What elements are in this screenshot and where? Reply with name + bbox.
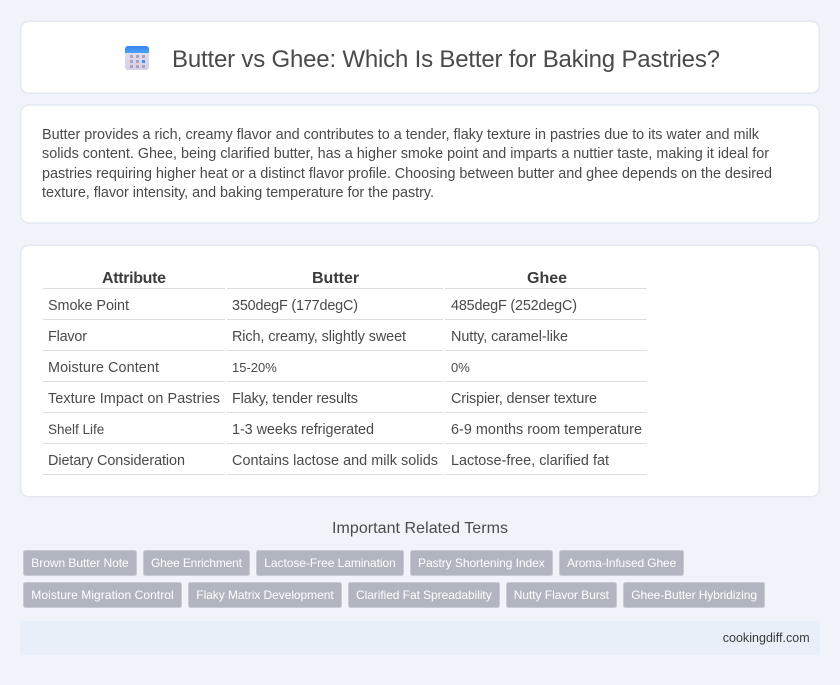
table row: shelf life	[48, 422, 642, 438]
table row: flavor	[48, 329, 568, 345]
tag: Ghee-Butter Hybridizing	[624, 582, 764, 608]
tag: Flaky Matrix Development	[188, 582, 342, 608]
table row: moisture content: 15-20%	[232, 360, 277, 375]
tag: Clarified Fat Spreadability: Clarified Fat Spreadability	[356, 588, 492, 602]
tag: Nutty Flavor Burst	[506, 582, 616, 608]
table row: flavor: Flavor	[48, 329, 87, 345]
table row: dietary consideration: Contains lactose and milk solids	[232, 453, 438, 469]
table row: dietary consideration: Dietary Consideration	[48, 453, 185, 469]
heading: related terms: Important Related Terms	[332, 520, 508, 537]
table row: flavor: Nutty, caramel-like	[451, 329, 568, 345]
table row: smoke point: 485degF (252degC)	[451, 298, 577, 314]
table row: smoke point: 350degF (177degC)	[232, 298, 358, 314]
table header: Ghee	[527, 270, 567, 287]
tag: Pastry Shortening Index	[410, 550, 552, 576]
tag: Moisture Migration Control: Moisture Migration Control	[31, 588, 174, 602]
tag: Ghee-Butter Hybridizing: Ghee-Butter Hybridizing	[631, 588, 757, 602]
panel: related term tags	[24, 550, 764, 608]
table row: texture impact: Crispier, denser texture	[451, 391, 597, 407]
footer: cookingdiff.com	[723, 631, 810, 645]
table header	[102, 270, 567, 287]
table row: flavor: Rich, creamy, slightly sweet	[232, 329, 406, 345]
tag: Ghee Enrichment: Ghee Enrichment	[151, 556, 243, 570]
tag: Lactose-Free Lamination	[256, 550, 404, 576]
table row: shelf life: Shelf Life	[48, 422, 104, 437]
tag: Flaky Matrix Development: Flaky Matrix Development	[196, 588, 334, 602]
tag: Lactose-Free Lamination: Lactose-Free Lamination	[264, 556, 396, 570]
text block: introduction: Butter provides a rich, creamy flavor and contributes to a tender, flaky texture in pastries due to its water and milk	[42, 127, 760, 143]
table row: smoke point: Smoke Point	[48, 298, 129, 314]
text block: introduction	[42, 127, 772, 201]
tag: Moisture Migration Control	[24, 582, 182, 608]
tag: Brown Butter Note	[24, 550, 136, 576]
tag: Clarified Fat Spreadability	[348, 582, 500, 608]
text block: introduction: solids content. Ghee, being clarified butter, has a higher smoke point and imparts a nuttier taste, making it ideal for	[42, 146, 769, 162]
tag: Aroma-Infused Ghee	[560, 550, 684, 576]
panel: comparison table	[21, 245, 819, 497]
text block: introduction: texture, flavor intensity, and baking temperature for the pastry.	[42, 185, 434, 201]
table row: shelf life: 6-9 months room temperature	[451, 422, 642, 438]
tag: Aroma-Infused Ghee: Aroma-Infused Ghee	[567, 556, 677, 570]
panel: introduction	[21, 105, 819, 223]
table row: shelf life: 1-3 weeks refrigerated	[232, 422, 374, 438]
tag: Ghee Enrichment	[144, 550, 250, 576]
table row: dietary consideration	[48, 453, 609, 469]
tag: Brown Butter Note: Brown Butter Note	[31, 556, 129, 570]
tag: Nutty Flavor Burst: Nutty Flavor Burst	[514, 588, 610, 602]
table row: moisture content	[48, 360, 470, 376]
footer	[20, 621, 820, 655]
text block: introduction: pastries requiring higher heat or a distinct flavor profile. Choosing between butter and ghee depends on the desired	[42, 166, 772, 182]
icon: calendar	[125, 46, 149, 70]
table row: texture impact: Texture Impact on Pastries	[48, 391, 220, 407]
tag: Pastry Shortening Index: Pastry Shortening Index	[418, 556, 545, 570]
title: Butter vs Ghee: Which Is Better for Baking Pastries?	[172, 46, 720, 73]
table row: moisture content: 0%	[451, 360, 470, 375]
panel: title header	[21, 21, 819, 93]
table row: moisture content: Moisture Content	[48, 360, 159, 376]
table row: texture impact	[48, 391, 597, 407]
table row: texture impact: Flaky, tender results	[232, 391, 358, 407]
table row: dietary consideration: Lactose-free, clarified fat	[451, 453, 609, 469]
table header: Butter	[312, 270, 359, 287]
table header: Attribute	[102, 270, 166, 287]
table row: smoke point	[48, 298, 577, 314]
